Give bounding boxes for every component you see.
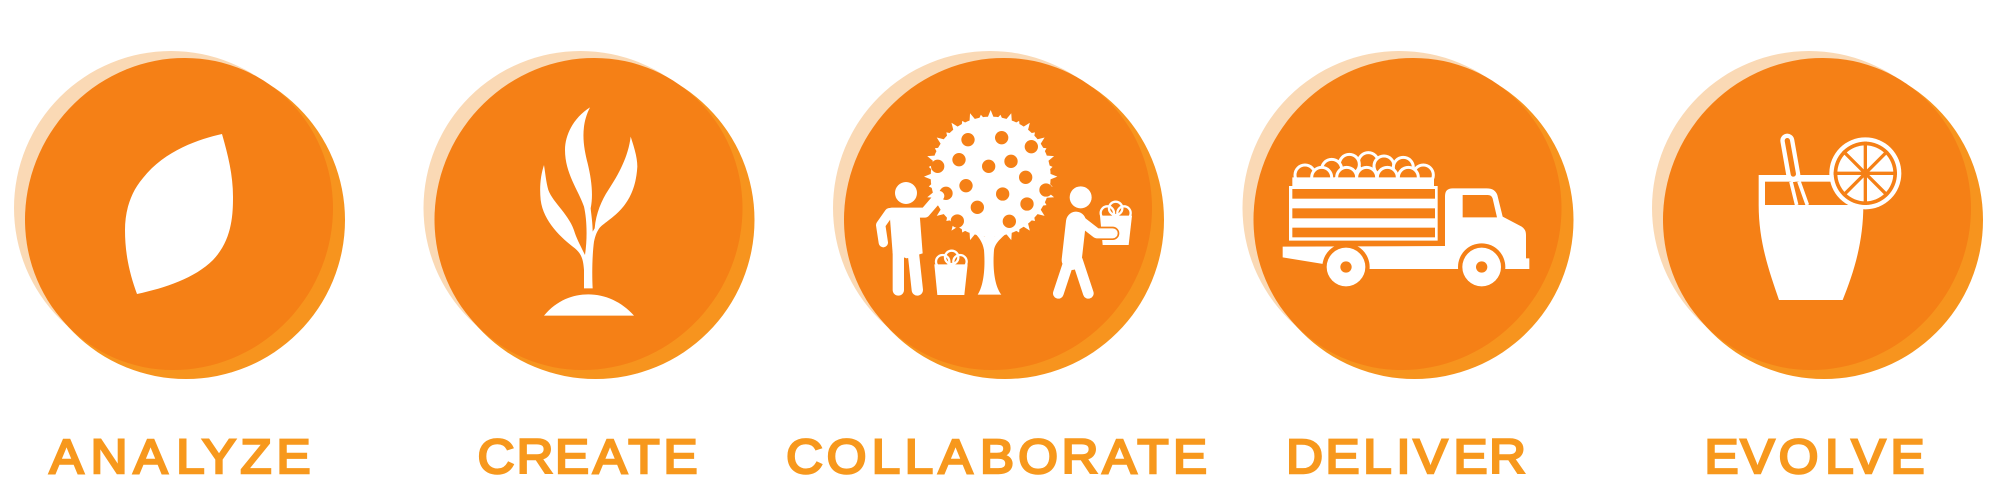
glass (1759, 175, 1863, 300)
label: deliver: DELIVER (1286, 429, 1526, 484)
label: analyze: ANALYZE (50, 429, 311, 484)
truck bed (1289, 177, 1438, 241)
icon: juice glass with straw and orange slice (1759, 137, 1901, 300)
icon: harvest scene (881, 110, 1132, 295)
person picking (881, 182, 939, 290)
label: evolve: EVOLVE (1705, 429, 1925, 484)
cab window (1463, 195, 1497, 217)
straw (1787, 141, 1807, 205)
panel: analyze (0, 0, 394, 431)
icon: leaf (125, 134, 233, 294)
label: collaborate: COLLABORATE (786, 429, 1207, 484)
tree (924, 110, 1057, 295)
wheels (1322, 243, 1505, 291)
panel: collaborate (783, 0, 1213, 431)
person carrying bucket (1058, 186, 1132, 293)
icon: sprouting plant (540, 107, 637, 316)
load of oranges (1295, 153, 1433, 187)
label: create: CREATE (478, 429, 698, 484)
bucket on ground (934, 251, 968, 295)
icon: truck with oranges (1283, 153, 1529, 291)
orange slice (1829, 137, 1901, 209)
truck cab and chassis (1283, 188, 1529, 269)
panel: deliver (1192, 0, 1623, 431)
panel: create (373, 0, 804, 431)
panel: evolve (1602, 0, 2000, 431)
